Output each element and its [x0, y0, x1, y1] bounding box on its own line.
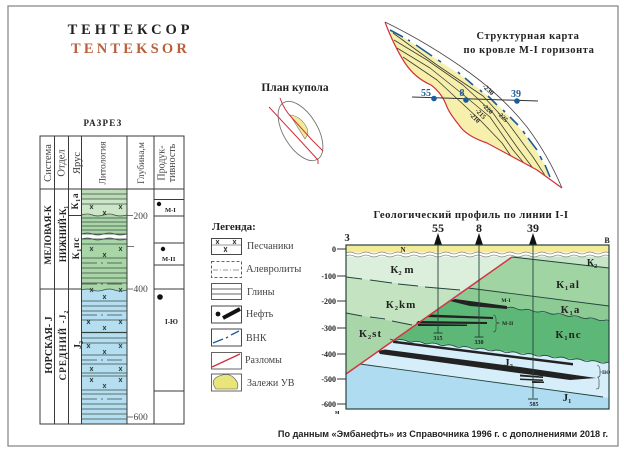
legend heading: Легенда:	[212, 221, 256, 233]
map wells	[421, 88, 521, 104]
section line	[412, 97, 538, 101]
profile heading: Геологический профиль по линии I-I	[373, 209, 569, 221]
fault	[346, 257, 512, 374]
contour labels: -225	[496, 110, 509, 124]
wells: 315	[434, 336, 442, 342]
direction labels	[344, 233, 610, 245]
depth scale: 400	[134, 285, 148, 295]
K1nc layer	[390, 300, 609, 363]
legend: siltstone: Алевролиты	[246, 264, 301, 275]
depth axis: -400	[321, 350, 336, 359]
layer labels	[359, 246, 610, 404]
legend: sandstone	[212, 238, 294, 254]
structural map	[385, 22, 595, 188]
map heading: Структурная карта	[476, 31, 580, 42]
layer labels: К₁a	[561, 304, 580, 316]
stratigraphic labels: МЕЛОВАЯ-К	[44, 205, 54, 265]
layer labels: К₂	[587, 258, 597, 269]
stratigraphic labels: НИЖНИЙ-К₁	[58, 206, 68, 262]
wells: 330	[474, 340, 484, 346]
dome plan	[261, 82, 332, 168]
K2st layer	[346, 313, 415, 374]
layer labels: К₂km	[386, 299, 416, 311]
column headers: тивность	[167, 143, 178, 182]
legend: siltstone	[212, 262, 301, 278]
map wells: 8	[460, 88, 464, 99]
legend: water-oil contact: ВНК	[246, 333, 267, 344]
stratigraphic labels	[44, 193, 84, 380]
depth axis: -100	[321, 272, 336, 281]
depth scale: 600	[134, 413, 148, 423]
dome contour	[269, 94, 332, 168]
wells: 39	[527, 221, 539, 235]
legend: clays: Глины	[247, 287, 275, 298]
depth axis: -300	[321, 324, 336, 333]
column table grid	[40, 136, 184, 424]
wells: 8	[476, 221, 482, 235]
map contours	[393, 33, 548, 180]
map fault	[385, 22, 562, 188]
legend: oil: Нефть	[246, 309, 274, 320]
contour labels: -210	[468, 111, 481, 125]
layer labels: N	[400, 246, 406, 254]
lithology column fill	[82, 189, 127, 424]
column headers: Ярус	[72, 152, 83, 174]
K1a layer	[452, 288, 609, 321]
direction labels: В	[604, 236, 610, 245]
depth axis: 0	[332, 245, 336, 254]
stratigraphic labels: К₁пс	[72, 237, 82, 259]
legend: faults: Разломы	[245, 355, 282, 366]
depth axis	[321, 245, 346, 416]
oil bodies	[378, 299, 596, 383]
stratigraphic boundaries	[360, 257, 609, 397]
profile frame	[346, 245, 609, 409]
title: ТЕНТЕКСОР	[68, 22, 193, 38]
layer labels: К₁nc	[555, 329, 582, 341]
layer labels: К₁al	[556, 279, 580, 291]
stratigraphic labels: К₁а	[71, 193, 81, 209]
map outer arc	[385, 22, 562, 188]
J2 layer	[360, 339, 609, 398]
dome faults	[269, 98, 323, 164]
J1 layer	[346, 245, 609, 409]
K1al layer	[468, 257, 609, 306]
K2 east layer	[505, 256, 609, 268]
stratigraphic labels: ЮРСКАЯ- J	[44, 316, 55, 374]
layer labels: J₂	[504, 357, 514, 369]
column headers: Глубина,м	[136, 142, 147, 184]
layer labels: М-II	[502, 321, 513, 327]
column headers: Система	[43, 144, 54, 182]
productivity markers: М-II	[162, 256, 176, 263]
productivity markers: I-Ю	[165, 318, 178, 326]
column headers: Литология	[98, 141, 108, 185]
N layer	[346, 245, 609, 253]
map wells: 55	[421, 88, 431, 99]
direction labels: З	[344, 233, 350, 244]
depth axis: м	[335, 409, 340, 416]
column headers	[43, 141, 178, 185]
layer labels: IЮ	[602, 370, 610, 376]
column headers: Продук-	[156, 145, 168, 181]
dome plan heading: План купола	[261, 82, 329, 94]
water-oil contact	[390, 30, 550, 177]
legend: oil	[212, 306, 274, 323]
stratigraphic labels: СРЕДНИЙ -J₂	[58, 310, 68, 380]
map oil zone	[389, 30, 550, 178]
wells: 55	[432, 221, 444, 235]
depth scale	[127, 212, 148, 423]
dome deposit	[290, 115, 308, 139]
legend: deposits	[212, 374, 295, 391]
contour labels: -230	[481, 83, 496, 97]
layer labels: М-I	[501, 298, 511, 304]
productivity markers	[157, 202, 178, 326]
depth axis: -500	[321, 375, 336, 384]
productivity markers: М-I	[165, 207, 176, 214]
layer labels: J₁	[563, 392, 571, 404]
stratigraphic column	[40, 118, 184, 424]
contour labels	[468, 83, 509, 125]
map wells: 39	[511, 89, 521, 100]
legend: clays	[212, 284, 275, 300]
layer labels: К₂st	[359, 328, 382, 340]
legend: water-oil contact	[212, 329, 267, 346]
K2m layer	[346, 256, 512, 291]
column heading: РАЗРЕЗ	[84, 118, 122, 128]
legend	[212, 221, 301, 391]
stratigraphic labels: J₂	[73, 341, 84, 349]
title	[68, 22, 193, 57]
wells: 585	[530, 402, 538, 408]
K2km layer	[346, 277, 462, 325]
column headers: Отдел	[56, 149, 68, 177]
map heading: по кровле М-I горизонта	[463, 45, 595, 56]
layer labels: К₂ m	[390, 264, 414, 276]
depth scale: 200	[134, 212, 148, 222]
source note: По данным «Эмбанефть» из Справочника 1996 г. с дополнениями 2018 г.	[278, 429, 608, 439]
geological profile	[321, 209, 610, 416]
contour labels: -220	[481, 102, 494, 116]
legend: faults	[212, 352, 282, 369]
depth axis: -200	[321, 297, 336, 306]
legend: sandstone: Песчаники	[247, 241, 294, 252]
map heading	[463, 31, 595, 56]
title: TENTEKSOR	[71, 41, 190, 57]
depth axis: -600	[321, 400, 336, 409]
contour labels: -215	[474, 107, 487, 121]
legend: deposits: Залежи УВ	[247, 378, 295, 389]
wells	[432, 221, 539, 408]
